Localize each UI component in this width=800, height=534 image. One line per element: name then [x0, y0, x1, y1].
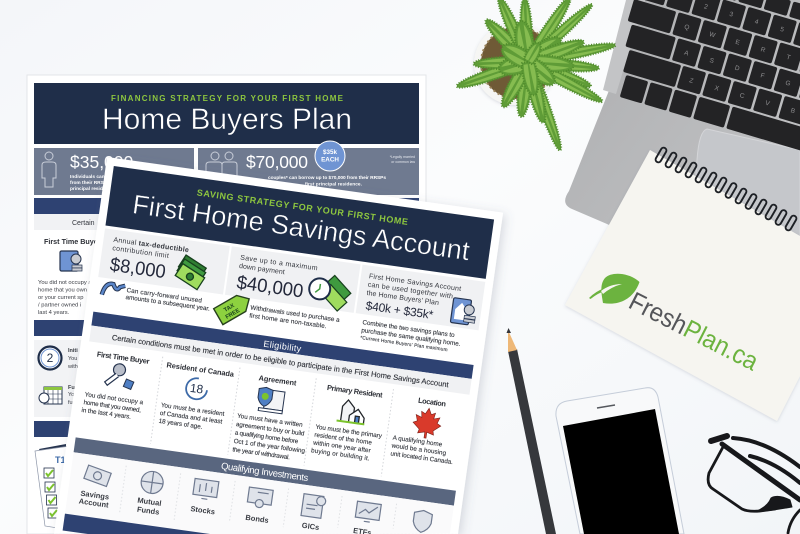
- pencil lead: [506, 328, 511, 333]
- carry-forward note: Can carry-forward unused: [126, 287, 203, 305]
- text: Fu: [68, 385, 75, 391]
- investment: bonds: [245, 487, 273, 525]
- text: of Canada and at least: [159, 410, 223, 426]
- key labels: S: [709, 57, 715, 65]
- text: You must have a written: [237, 413, 304, 429]
- key labels: X: [713, 85, 720, 93]
- combine note: Combine the two savings plans to: [362, 319, 455, 339]
- qualifying investments bar: [74, 437, 456, 506]
- text: down payment: [239, 263, 285, 276]
- section bar: [34, 421, 419, 437]
- description: Individuals can: [70, 174, 105, 180]
- text: in the last 4 years.: [81, 407, 132, 421]
- amount: $40k + $35k*: [365, 299, 434, 322]
- sheet behind: [39, 444, 66, 453]
- icon: document with shield: [256, 386, 285, 414]
- laptop body: [565, 0, 800, 320]
- footnote: [390, 155, 415, 164]
- text: You did not occupy a: [84, 391, 144, 406]
- icon: clock and money: [307, 272, 356, 313]
- text: You must be a resident: [160, 402, 225, 418]
- icon: number 2: [38, 346, 62, 370]
- text: Initi: [68, 348, 78, 354]
- investment: stocks: [190, 478, 219, 516]
- label: Account: [78, 496, 110, 510]
- hinge: [711, 436, 727, 441]
- icon: tax free tag: [214, 291, 254, 325]
- eligibility bar: [91, 312, 474, 379]
- column: location: Location: [418, 396, 447, 409]
- description: first principal residence.: [305, 182, 362, 188]
- stat panel: couples: [198, 141, 419, 195]
- panel: withdrawals: [34, 340, 419, 417]
- check marks: [46, 470, 57, 516]
- text: [68, 385, 75, 406]
- column: agreement: Agreement: [258, 373, 298, 388]
- description: [268, 175, 386, 188]
- label: Stocks: [190, 504, 216, 516]
- logo: FreshPlan.ca: FreshPlan.ca: [624, 286, 764, 377]
- lens frame: [708, 447, 775, 511]
- combine note: *Current Home Buyers' Plan maximum: [360, 335, 448, 353]
- icon: 18: 18: [189, 381, 205, 397]
- label: GICs: [301, 521, 320, 532]
- badge: 35k each: EACH: [321, 156, 339, 164]
- investments panel: [65, 452, 454, 534]
- text: You must be the primary: [315, 424, 383, 440]
- icon: number 2: 2: [47, 351, 54, 365]
- T1 forms: [35, 444, 70, 530]
- laptop: [565, 0, 800, 320]
- label: Funds: [136, 505, 160, 517]
- column: first time buyer: First Time Buyer: [96, 350, 150, 366]
- icon: tax free tag: FREE: [225, 308, 241, 321]
- combine note: [360, 319, 462, 355]
- text: contribution limit: [112, 245, 169, 260]
- description: [70, 174, 114, 192]
- key labels: D: [734, 65, 741, 73]
- text: [311, 424, 383, 464]
- leaves: [455, 0, 617, 152]
- trackpad: [690, 129, 800, 300]
- badge: 35k each: [315, 141, 345, 171]
- second lens: [788, 510, 800, 533]
- dividers: [151, 357, 393, 476]
- stat panel: individuals: [34, 148, 194, 195]
- text: [67, 348, 78, 370]
- column: resident of Canada: Resident of Canada: [166, 360, 235, 379]
- temple arms: [733, 438, 800, 483]
- subtitle: SAVING STRATEGY FOR YOUR FIRST HOME: [196, 187, 409, 227]
- arrow icon: [102, 283, 125, 298]
- potted plant: [455, 0, 617, 152]
- amount: $35,000: [70, 152, 134, 172]
- key labels: 3: [728, 11, 734, 19]
- conditions band: Certain: [72, 220, 95, 227]
- column: agreement: [232, 371, 315, 463]
- column: resident of Canada: [158, 360, 235, 434]
- description: principal residence: [70, 186, 114, 192]
- text: Oct 1 of the year following: [233, 438, 306, 455]
- conditions band: Certain conditions must be met in order to be eligible to participate in the First Home Savings Account: [111, 333, 450, 389]
- investment: GICs: [299, 494, 326, 532]
- badge: 35k each: $35k: [323, 149, 337, 156]
- page sheet: [27, 75, 426, 534]
- investment: ETFs: [353, 501, 381, 534]
- label: [78, 489, 111, 510]
- key labels: W: [708, 31, 717, 40]
- text: Yo: [68, 392, 74, 398]
- text: home that you owned,: [83, 399, 142, 414]
- brow bar: [722, 444, 800, 500]
- checklist: [44, 468, 58, 518]
- text: [158, 402, 225, 434]
- key labels: B: [790, 107, 796, 115]
- label: [136, 496, 162, 517]
- keyboard: [606, 0, 800, 167]
- amount: $8,000: [109, 255, 167, 283]
- icon: key: [104, 362, 136, 390]
- tax free note: [249, 304, 340, 332]
- T1 label: T1: [55, 455, 66, 465]
- text: within one year after: [312, 439, 371, 455]
- carry-forward note: amounts to a subsequent year.: [125, 294, 211, 313]
- key labels: 5: [779, 26, 785, 34]
- body text: or your current sp: [38, 295, 83, 301]
- front page: First Home Savings Account: [54, 157, 503, 534]
- column: primary resident: Primary Resident: [326, 383, 384, 400]
- investment: mutual funds: [136, 470, 166, 517]
- tax free note: first home are non-taxable.: [249, 312, 327, 330]
- text: can be used together with: [367, 282, 453, 300]
- page sheet: [54, 157, 503, 534]
- bottom section bar: [63, 514, 211, 534]
- eligibility bar: Eligibility: [263, 339, 302, 354]
- icon: house and coins: [450, 298, 478, 326]
- investment: insurance shield: [412, 509, 433, 534]
- text: [232, 413, 309, 463]
- header band: [34, 83, 419, 144]
- text: with: [67, 364, 78, 370]
- key labels: R: [760, 46, 766, 54]
- pencil: [506, 328, 556, 534]
- text: 18 years of age.: [158, 418, 203, 431]
- icon: tax free tag: TAX: [223, 303, 236, 314]
- icon: calendar: [39, 387, 62, 404]
- text: [366, 273, 462, 310]
- column: primary resident: [311, 382, 389, 464]
- notebook: [565, 147, 800, 421]
- column: first time buyer: First Time Buyer: [44, 237, 101, 246]
- key labels: A: [683, 50, 690, 58]
- header band: [105, 166, 494, 279]
- body text: last 4 years.: [38, 310, 70, 316]
- text: First Home Savings Account: [368, 273, 462, 293]
- text: the Home Buyers' Plan: [366, 290, 439, 307]
- footnote: or common law: [391, 160, 415, 164]
- section bar: [34, 320, 419, 336]
- text: fu: [68, 400, 73, 406]
- body text: [38, 280, 92, 316]
- nose pad: [757, 496, 792, 512]
- back page: Home Buyers Plan: [27, 75, 426, 534]
- key labels: 4: [754, 18, 760, 26]
- text: resident of the home: [314, 432, 373, 447]
- body text: You did not occupy a: [38, 280, 92, 286]
- smartphone: [556, 388, 684, 534]
- key labels: C: [739, 92, 746, 100]
- text: a qualifying home before: [234, 430, 299, 445]
- pot: [474, 23, 556, 105]
- key labels: F: [760, 72, 765, 80]
- icon: person: [42, 152, 56, 187]
- icon: money: [174, 255, 210, 290]
- sheet front: [35, 446, 70, 530]
- panel: down payment: [225, 246, 361, 313]
- text: You: [68, 356, 77, 362]
- label: Savings: [80, 489, 110, 502]
- speaker grille: [603, 0, 645, 94]
- investment: savings account: [78, 464, 114, 510]
- glasses: [708, 436, 800, 533]
- notebook page: [565, 150, 800, 421]
- body text: / partner owned i: [38, 302, 81, 308]
- text: Save up to a maximum: [240, 255, 318, 272]
- text: A qualifying home: [392, 435, 443, 448]
- text: would be a housing: [390, 442, 447, 457]
- icon: house and coins: [60, 251, 82, 271]
- column: first time buyer: [81, 349, 150, 422]
- amount: $70,000: [246, 152, 308, 172]
- tax free note: Withdrawals used to purchase a: [250, 304, 340, 324]
- pencil body: [508, 349, 556, 534]
- key labels: T: [785, 54, 791, 62]
- column: first time buyer: [38, 237, 101, 316]
- combine note: purchase the same qualifying home.: [361, 327, 461, 348]
- title: First Home Savings Account: [131, 189, 472, 266]
- body text: home that you own: [38, 288, 87, 294]
- phone speaker: [597, 405, 615, 408]
- icon: two people: [206, 152, 237, 178]
- label: Bonds: [245, 513, 269, 525]
- text: unit located in Canada.: [390, 450, 454, 466]
- footnote: *Legally married: [390, 155, 415, 159]
- text: [389, 434, 456, 466]
- spiral binding: [655, 147, 797, 231]
- key labels: Z: [688, 77, 694, 85]
- key labels: 2: [703, 3, 709, 11]
- icon: house: [337, 399, 367, 424]
- column: location: [389, 393, 462, 466]
- pencil wood tip: [508, 330, 517, 352]
- text: agreement to buy or build: [236, 421, 305, 438]
- panel: combine plans: [356, 265, 485, 330]
- text: buying or building it.: [311, 447, 370, 462]
- conditions band: [34, 214, 419, 230]
- icon: maple leaf: [411, 406, 443, 440]
- key labels: Q: [683, 24, 690, 32]
- phone body: [556, 388, 684, 534]
- dividers: [119, 466, 397, 534]
- description: couples* can borrow up to $70,000 from their RRSPs: [268, 175, 386, 181]
- phone screen: [563, 409, 679, 534]
- subtitle: FINANCING STRATEGY FOR YOUR FIRST HOME: [111, 94, 344, 103]
- amount: $40,000: [235, 272, 305, 303]
- text: Annual tax-deductible: [113, 237, 189, 254]
- key labels: [669, 0, 800, 115]
- text: [81, 391, 144, 422]
- title: Home Buyers Plan: [102, 103, 352, 136]
- key labels: V: [764, 100, 771, 108]
- panel: annual limit: [98, 228, 230, 294]
- key labels: E: [734, 39, 741, 47]
- soil: [481, 27, 553, 99]
- logo: leaf: [589, 274, 640, 304]
- label: Mutual: [137, 496, 162, 508]
- key labels: G: [784, 80, 791, 88]
- text: the year of withdrawal.: [232, 446, 291, 461]
- qualifying investments bar: Qualifying Investments: [220, 461, 309, 484]
- section bar: [34, 198, 419, 214]
- description: from their RRSPs: [70, 180, 110, 186]
